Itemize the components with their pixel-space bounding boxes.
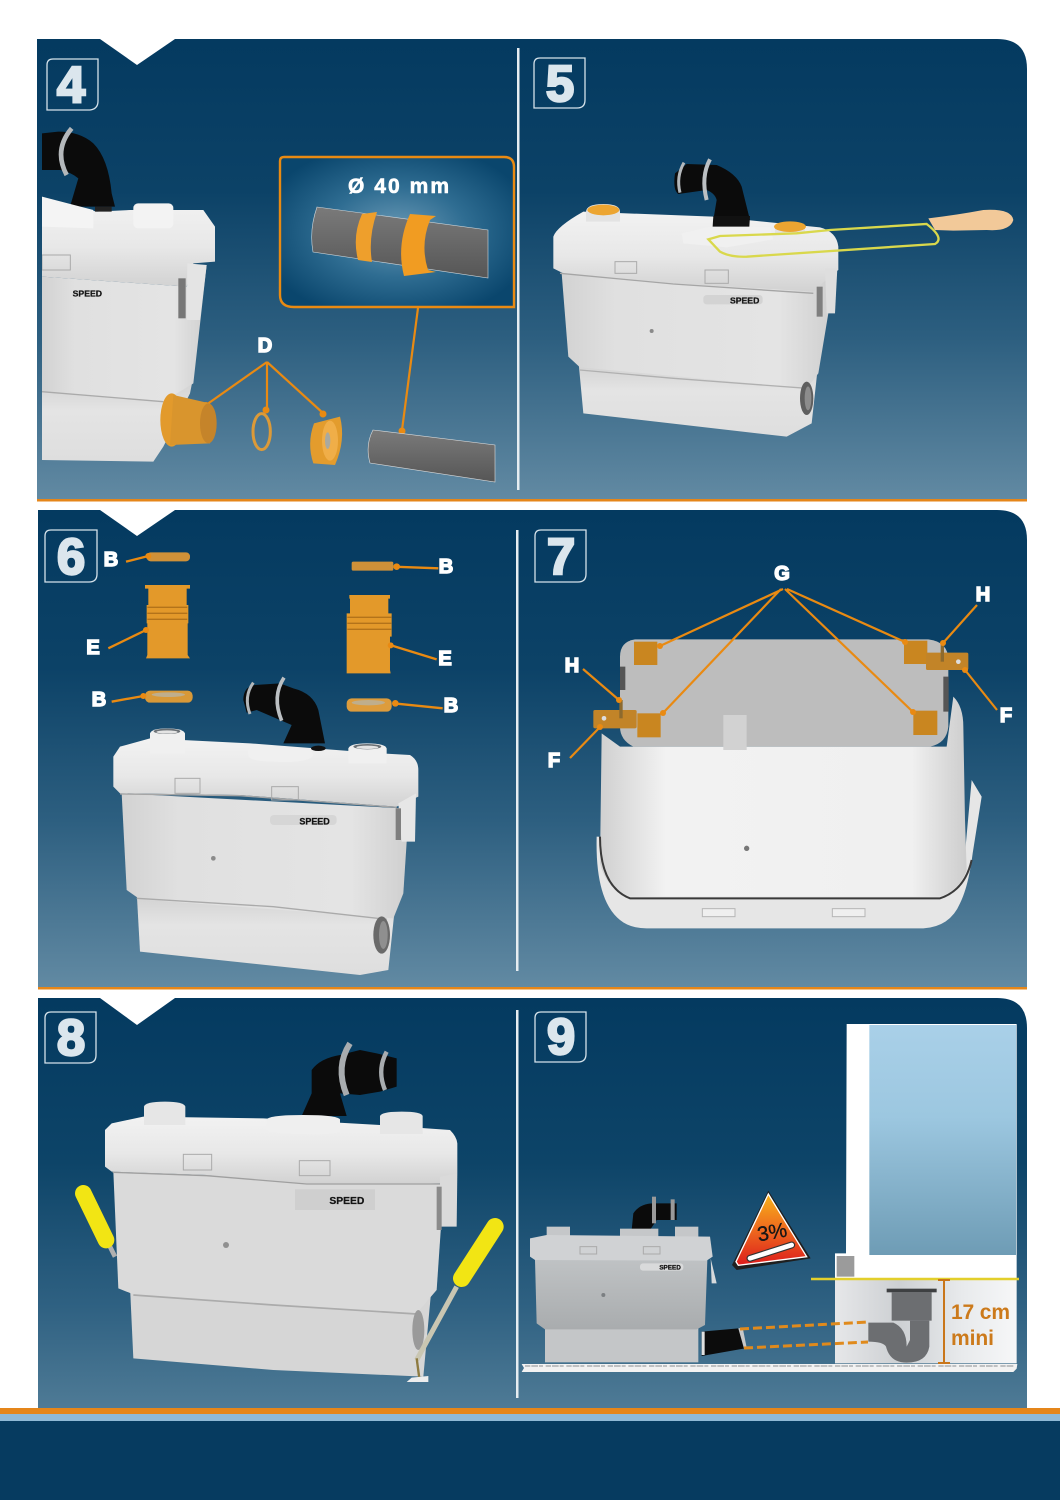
labels: B and E, step 6: B <box>104 549 118 571</box>
illustration: pump upside down, step 7 <box>597 639 982 928</box>
icon: left yellow screwdriver <box>83 1193 115 1257</box>
labels: B and E, step 6: E <box>86 637 100 659</box>
leaders: G H F, step 7: H <box>565 655 579 677</box>
level line and 17 cm dimension <box>811 1279 1019 1363</box>
leader: D: D <box>258 335 272 357</box>
labels: B and E, step 6: B <box>92 689 106 711</box>
illustration: bath and siphon <box>835 1024 1017 1363</box>
leaders: G H F, step 7: F <box>548 750 560 772</box>
illustration: pump cropped, step 4 <box>42 128 215 462</box>
illustration: pump, step 9 <box>530 1197 747 1362</box>
illustration: pump, step 6: SPEED <box>299 817 330 827</box>
step number 4: 4 <box>57 56 86 113</box>
footer band <box>0 1408 1060 1500</box>
labels: B and E, step 6: B <box>439 556 453 578</box>
step number 9 <box>535 1008 586 1065</box>
step number 5 <box>534 55 585 112</box>
icon: right yellow screwdriver <box>407 1227 495 1382</box>
callout: 40 mm pipe inset: Ø 40 mm <box>348 175 449 198</box>
level line and 17 cm dimension: 17 cm <box>951 1301 1010 1324</box>
step number 7 <box>535 528 586 585</box>
parts: orange fittings D <box>160 393 342 465</box>
step number 4 <box>47 56 98 113</box>
parts: left gaskets and sleeve, step 6 <box>108 552 193 703</box>
floor line <box>522 1364 1017 1372</box>
step number 7: 7 <box>547 528 575 585</box>
parts: orange feet G and brackets F <box>593 641 968 737</box>
parts: right gaskets and sleeve, step 6 <box>347 562 443 712</box>
leaders: G H F, step 7 <box>548 563 1012 772</box>
step number 5: 5 <box>546 55 574 112</box>
illustration: pump cropped, step 4: SPEED <box>73 289 102 299</box>
leaders: G H F, step 7: G <box>774 563 790 585</box>
slope dashed lines <box>740 1322 868 1348</box>
illustration: pump, step 5 <box>553 159 838 437</box>
icon: 3% warning triangle <box>732 1191 811 1270</box>
step number 6 <box>45 528 97 585</box>
level line and 17 cm dimension: mini <box>951 1327 994 1350</box>
icon: 3% warning triangle: 3% <box>755 1219 789 1246</box>
callout: 40 mm pipe inset <box>280 157 514 307</box>
step number 8 <box>45 1009 96 1066</box>
panel: steps 4 and 5 background <box>37 39 1027 502</box>
illustration: pump, step 6 <box>113 678 418 975</box>
illustration: yellow wire tool with wooden handle <box>708 210 1013 257</box>
illustration: pump, step 8: SPEED <box>329 1196 365 1207</box>
illustration: pump, step 9: SPEED <box>659 1264 681 1271</box>
panel: steps 6 and 7 background <box>38 510 1027 990</box>
panel: steps 8 and 9 background <box>38 998 1027 1410</box>
labels: B and E, step 6: B <box>444 695 458 717</box>
step number 8: 8 <box>57 1009 85 1066</box>
leaders: G H F, step 7: F <box>1000 705 1012 727</box>
step number 9: 9 <box>547 1008 575 1065</box>
illustration: pump, step 8 <box>105 1043 457 1377</box>
leaders: G H F, step 7: H <box>976 584 990 606</box>
illustration: pump, step 5: SPEED <box>730 295 759 305</box>
part: grey pipe <box>368 430 495 482</box>
leader: D <box>203 308 418 434</box>
labels: B and E, step 6: E <box>438 648 452 670</box>
step number 6: 6 <box>57 528 85 585</box>
labels: B and E, step 6 <box>86 549 458 717</box>
